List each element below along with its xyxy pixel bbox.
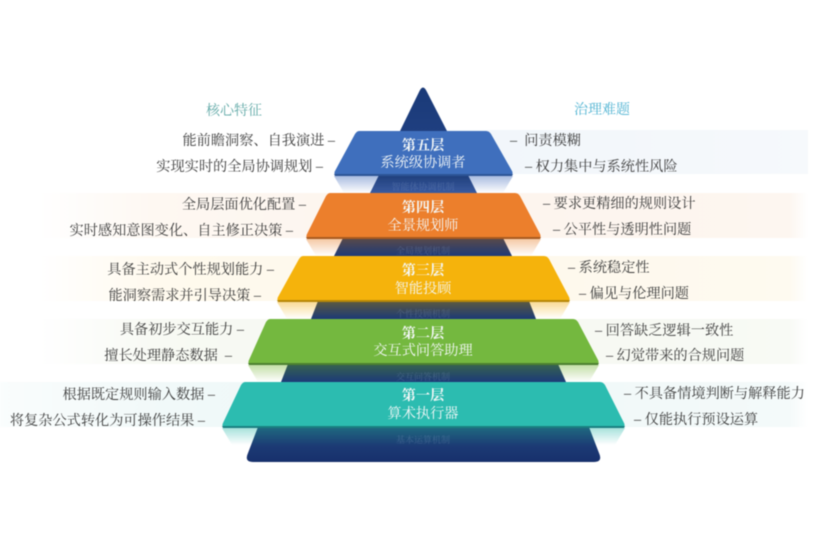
layer 5: system-level coordinator: 系统级协调者: [380, 154, 466, 171]
left column: core features: 能前瞻洞察、自我演进 –: [182, 132, 336, 149]
layer 1: arithmetic executor: [222, 382, 625, 428]
dark connector: between layers 4 and 3: 全局规划机制: [396, 245, 450, 256]
layer 4: panoramic planner: 全景规划师: [388, 217, 458, 234]
dark connector: between layers 2 and 1: [281, 364, 566, 382]
layer 3: intelligent advisor: [277, 256, 570, 302]
layer 1: arithmetic executor: 算术执行器: [388, 405, 458, 422]
layer 4: panoramic planner: [306, 193, 541, 239]
dark pyramid base: 基本运算机制: [396, 434, 450, 445]
layer 5: system-level coordinator: 第五层: [402, 138, 445, 154]
left column: core features: 根据既定规则输入数据 –: [62, 386, 216, 403]
layer 2: interactive Q&A assistant: [248, 319, 599, 365]
right column: governance challenges: – 不具备情境判断与解释能力: [623, 385, 805, 402]
right column: governance challenges: – 仅能执行预设运算: [633, 411, 758, 428]
dark connector: between layers 3 and 2: [311, 301, 536, 319]
layer 3: intelligent advisor: 第三层: [402, 263, 445, 279]
right column: governance challenges: – 要求更精细的规则设计: [542, 195, 696, 212]
column heading: core features: 核心特征: [206, 102, 262, 119]
dark connector: between layers 4 and 3: [334, 238, 512, 256]
left column: core features: 将复杂公式转化为可操作结果 –: [10, 412, 206, 429]
left column: core features: 具备主动式个性规划能力 –: [107, 261, 275, 278]
right column: governance challenges: [509, 132, 805, 428]
left column: core features: [10, 132, 336, 429]
right column: governance challenges: – 公平性与透明性问题: [552, 221, 691, 238]
left column: core features: 具备初步交互能力 –: [120, 321, 245, 338]
left column: core features: 全局层面优化配置 –: [182, 196, 307, 213]
layer 1: arithmetic executor: 第一层: [402, 388, 445, 404]
right column: governance challenges: – 问责模糊: [509, 132, 581, 149]
dark pyramid base: [247, 427, 600, 462]
left column: core features: 能洞察需求并引导决策 –: [108, 287, 262, 304]
layer 2: interactive Q&A assistant: 第二层: [402, 326, 445, 342]
layer 3: intelligent advisor: 智能投顾: [395, 280, 452, 297]
right column: governance challenges: – 回答缺乏逻辑一致性: [594, 322, 733, 339]
dark connector: between layers 3 and 2: 个性投顾机制: [396, 308, 450, 319]
background bands: [0, 130, 808, 427]
layer 4: panoramic planner: 第四层: [402, 200, 445, 216]
right column: governance challenges: – 偏见与伦理问题: [578, 285, 689, 302]
left column: core features: 实时感知意图变化、自主修正决策 –: [70, 222, 294, 239]
layer reflections: [222, 176, 625, 445]
apex triangle: [400, 88, 447, 131]
right column: governance challenges: – 系统稳定性: [567, 259, 650, 276]
dark connector: between layers 5 and 4: 智能体协调机制: [391, 181, 455, 192]
left column: core features: 擅长处理静态数据 –: [104, 347, 233, 364]
right column: governance challenges: – 幻觉带来的合规问题: [605, 347, 744, 364]
layer 2: interactive Q&A assistant: 交互式问答助理: [373, 343, 473, 359]
right column: governance challenges: – 权力集中与系统性风险: [524, 158, 678, 175]
layer 5: system-level coordinator: [334, 131, 513, 176]
column heading: governance challenges: 治理难题: [574, 102, 630, 118]
dark connector: between layers 2 and 1: 交互问答机制: [396, 371, 450, 382]
dark connector: between layers 5 and 4: [370, 175, 477, 193]
left column: core features: 实现实时的全局协调规划 –: [156, 158, 324, 175]
